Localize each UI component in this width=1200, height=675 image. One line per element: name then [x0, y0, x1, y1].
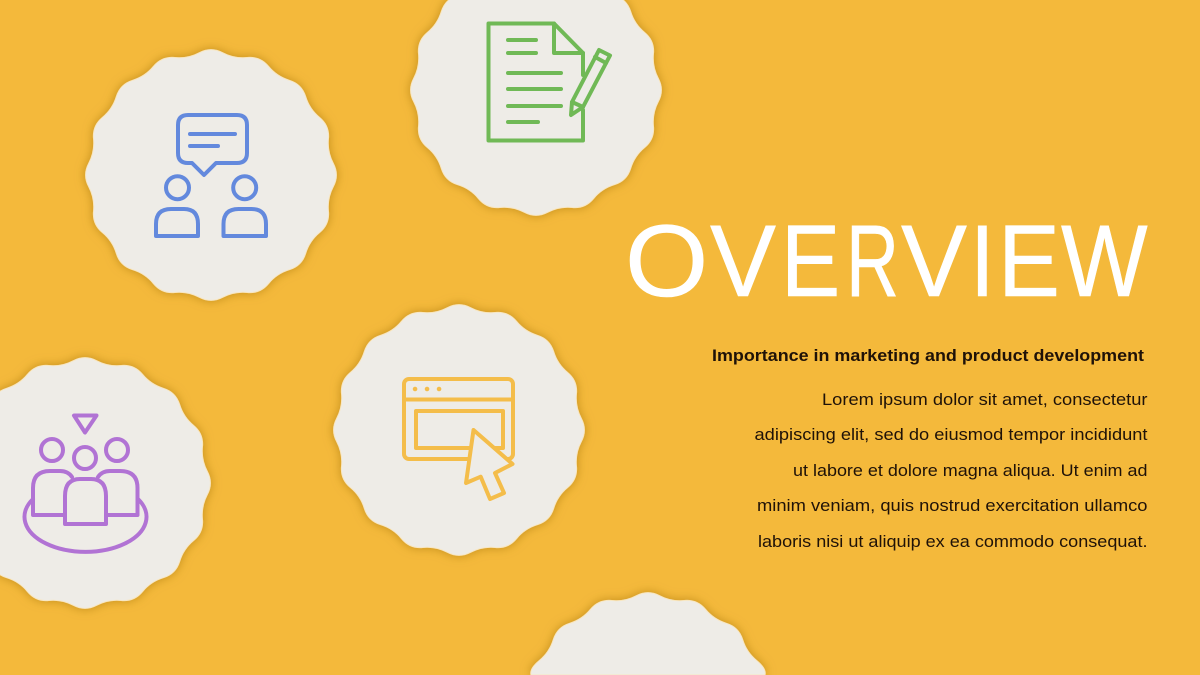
badge: browser click — [334, 305, 584, 555]
badge: conversation — [86, 50, 336, 300]
subheading: Importance in marketing and product development — [712, 347, 1145, 365]
body text: laboris nisi ut aliquip ex ea commodo consequat. — [758, 533, 1148, 551]
body text: ut labore et dolore magna aliqua. Ut enim ad — [793, 462, 1148, 480]
title: E — [781, 204, 840, 318]
icon: document and pencil — [488, 24, 610, 140]
title: V — [710, 204, 776, 318]
body text: minim veniam, quis nostrud exercitation ullamco — [757, 497, 1148, 515]
title: I — [970, 204, 994, 318]
title: V — [901, 204, 967, 318]
title — [625, 204, 1148, 318]
body text: adipiscing elit, sed do eiusmod tempor incididunt — [754, 426, 1148, 444]
title: O — [625, 204, 708, 318]
icon: browser window with cursor — [404, 379, 513, 499]
badge: bottom, cropped — [531, 593, 765, 675]
badge: document — [411, 0, 661, 215]
title: W — [1061, 204, 1148, 318]
icon: group of people around a table — [24, 416, 146, 552]
icon: two people talking — [156, 115, 266, 236]
body text: Lorem ipsum dolor sit amet, consectetur — [822, 391, 1148, 409]
badge: audience — [0, 358, 210, 608]
title: R — [846, 204, 899, 318]
body text — [754, 391, 1148, 551]
title: E — [998, 204, 1060, 318]
